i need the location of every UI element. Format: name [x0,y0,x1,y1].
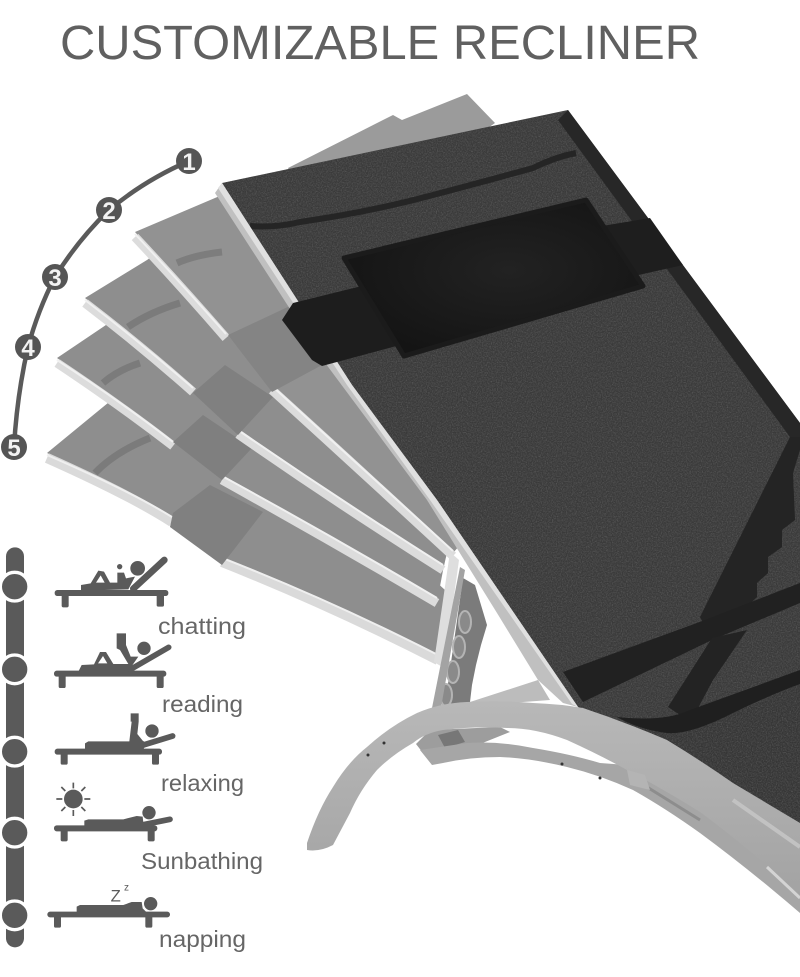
label: reading: reading [162,691,243,717]
ghost backrest: position four [57,310,445,603]
ghost backrest: position two [135,195,460,556]
fabric lower section [617,684,800,830]
ghost backrest: position three [85,240,450,570]
title: CUSTOMIZABLE RECLINER [60,17,700,70]
position 5 [1,434,27,462]
armrest highlight [733,800,800,847]
main frame rail [215,183,578,707]
ghost backrest: lowest position [47,385,445,662]
left strap [282,284,400,366]
fabric texture [222,110,800,830]
armrest slot [627,770,650,790]
label: Sunbathing: Sunbathing [141,848,263,874]
position 1 [176,148,202,176]
position 4 [15,334,41,362]
position 1: 1 [182,149,196,176]
position 3: 3 [48,265,62,292]
right edge band [558,110,800,445]
strut [432,567,465,708]
ghost recline positions [47,94,495,668]
cross strap [563,583,800,702]
lower strap [668,630,747,715]
ratchet rings [440,611,471,706]
position 3 [42,264,68,292]
recline position scale [1,148,202,462]
lower rail [420,743,800,913]
armrest lower highlight [767,867,800,898]
armrest shadow line [647,787,700,820]
icon: sunbathing [54,783,170,841]
headrest pillow [344,200,643,356]
icon: chatting [55,560,168,607]
icon: napping: z [124,882,129,893]
curved strap [617,670,800,733]
right strap [590,218,683,278]
top seam [250,153,576,226]
icon: napping [47,882,170,928]
label: relaxing: relaxing [161,770,244,796]
ghost backrest: upper position [288,94,495,200]
main seat fabric [222,110,800,830]
diagonal shadow strap [700,437,800,640]
position 2 [96,197,122,225]
icon: reading [54,633,169,688]
position 5: 5 [7,435,21,462]
position 4: 4 [21,335,35,362]
armrest [307,701,800,898]
brace bars [416,680,550,762]
armrest rivets [366,742,602,780]
position 2: 2 [102,198,116,225]
label: chatting: chatting [158,613,246,639]
icon: relaxing [55,713,173,765]
icon: napping: Z [111,886,121,905]
reclining mechanism [432,567,487,708]
ratchet teeth [445,578,487,705]
ghost frame junction [434,552,459,668]
label: napping: napping [159,926,246,952]
activity timeline [0,547,29,947]
